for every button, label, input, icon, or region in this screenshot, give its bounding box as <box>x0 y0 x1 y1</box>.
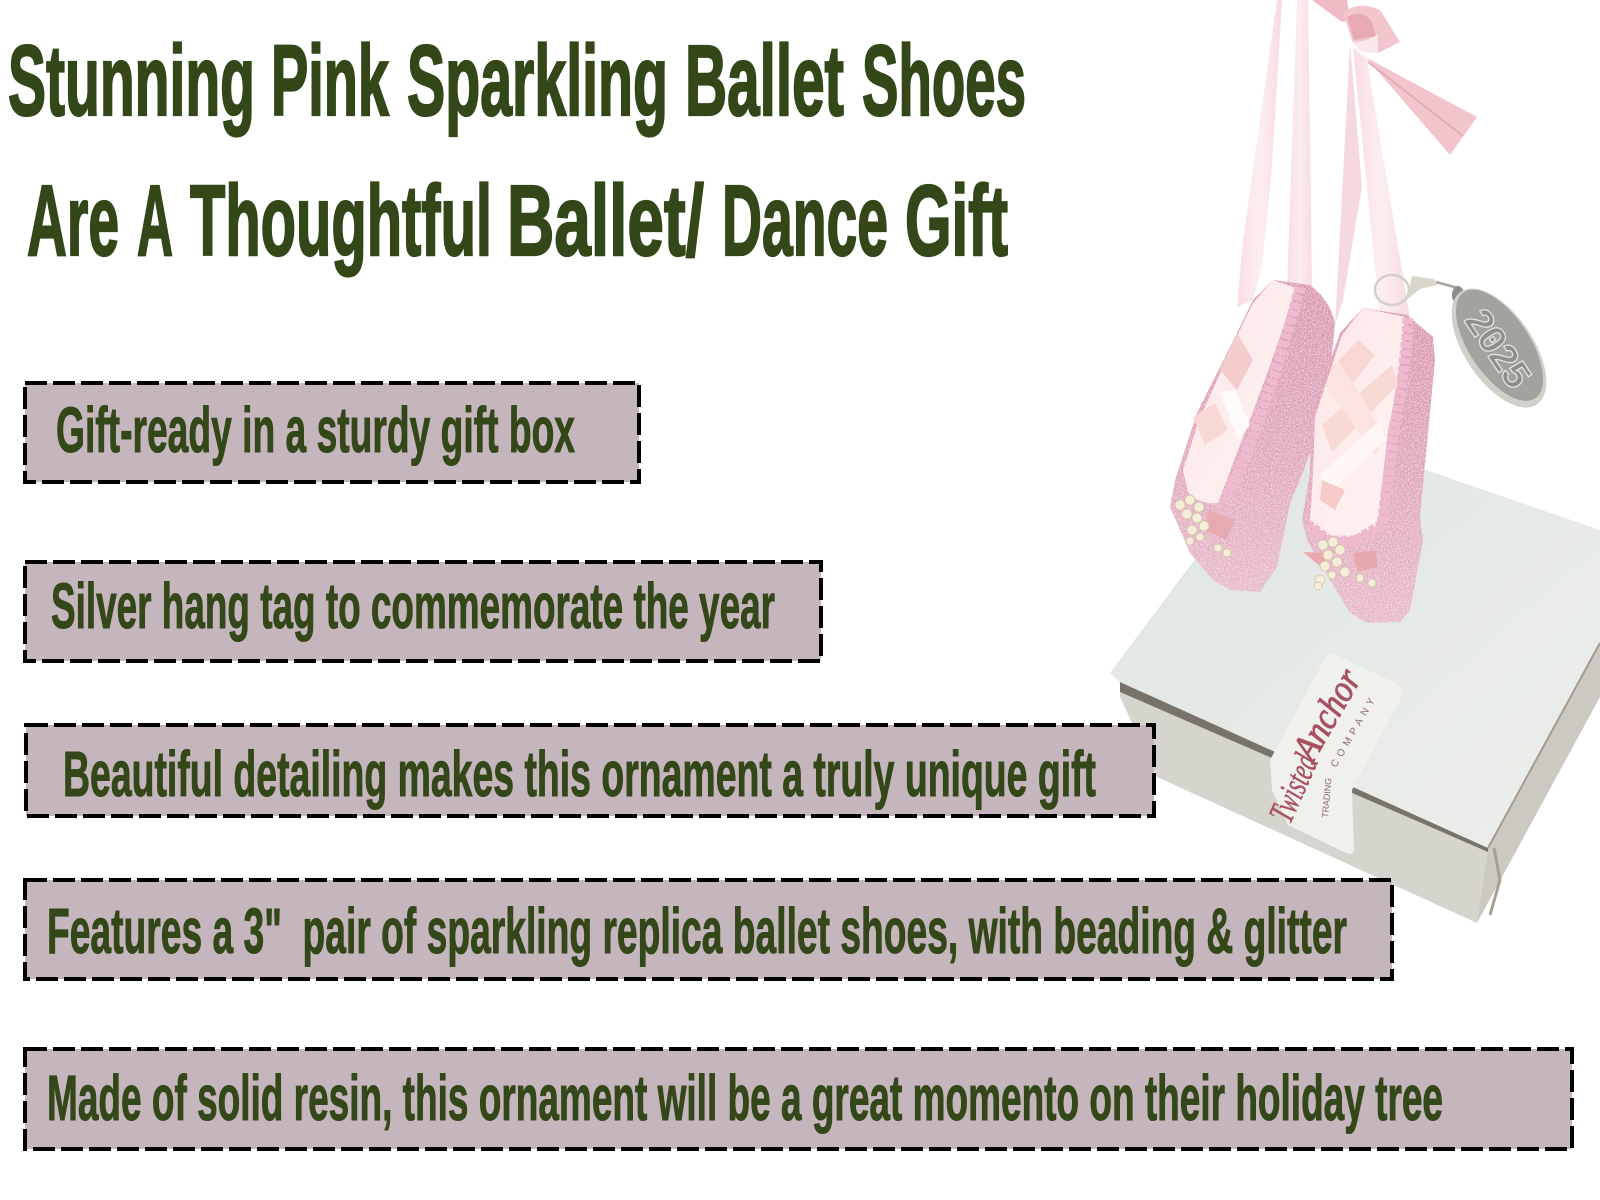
feature box 3 <box>26 725 1154 816</box>
sticker: COMPANY <box>1329 696 1378 770</box>
feature text 1: Gift-ready in a sturdy gift box <box>56 394 575 466</box>
title line 2: Gift <box>905 165 1008 277</box>
title line 2: Ballet/ <box>507 165 704 277</box>
left shoe <box>1170 280 1335 592</box>
feature box 2 <box>25 562 821 661</box>
gift box <box>1110 425 1600 923</box>
sticker: Anchor <box>1283 661 1370 770</box>
title line 1 <box>8 25 1026 137</box>
title line 1: Sparkling <box>407 25 668 137</box>
feature box 5 <box>25 1049 1572 1149</box>
title line 1: Ballet <box>685 25 844 137</box>
title line 1: Shoes <box>862 25 1026 137</box>
pearls and bow <box>1303 537 1378 590</box>
clasp and tag <box>1375 273 1565 423</box>
sticker: Twisted <box>1261 747 1326 828</box>
right shoe <box>1302 308 1435 623</box>
title line 1: Stunning <box>8 25 255 137</box>
title line 2 <box>27 165 1008 277</box>
title line 1: Pink <box>271 25 389 137</box>
product photo: ornament above gift box <box>1110 0 1600 923</box>
sticker <box>1261 654 1402 854</box>
title line 2: Thoughtful <box>190 165 492 277</box>
tag: 2025 <box>1433 273 1565 423</box>
pearls and bow <box>1175 495 1235 557</box>
title line 2: Dance <box>722 165 888 277</box>
sticker: TRADING <box>1320 777 1333 818</box>
feature text 2: Silver hang tag to commemorate the year <box>51 570 775 642</box>
feature box 1 <box>25 383 639 482</box>
tag: 2025: 2025 <box>1452 301 1539 400</box>
title line 2: Are <box>27 165 119 277</box>
feature box 4 <box>25 880 1392 979</box>
ribbons <box>1237 0 1410 325</box>
bow <box>1312 0 1477 155</box>
title <box>8 25 1026 277</box>
title line 2: A <box>137 165 173 277</box>
